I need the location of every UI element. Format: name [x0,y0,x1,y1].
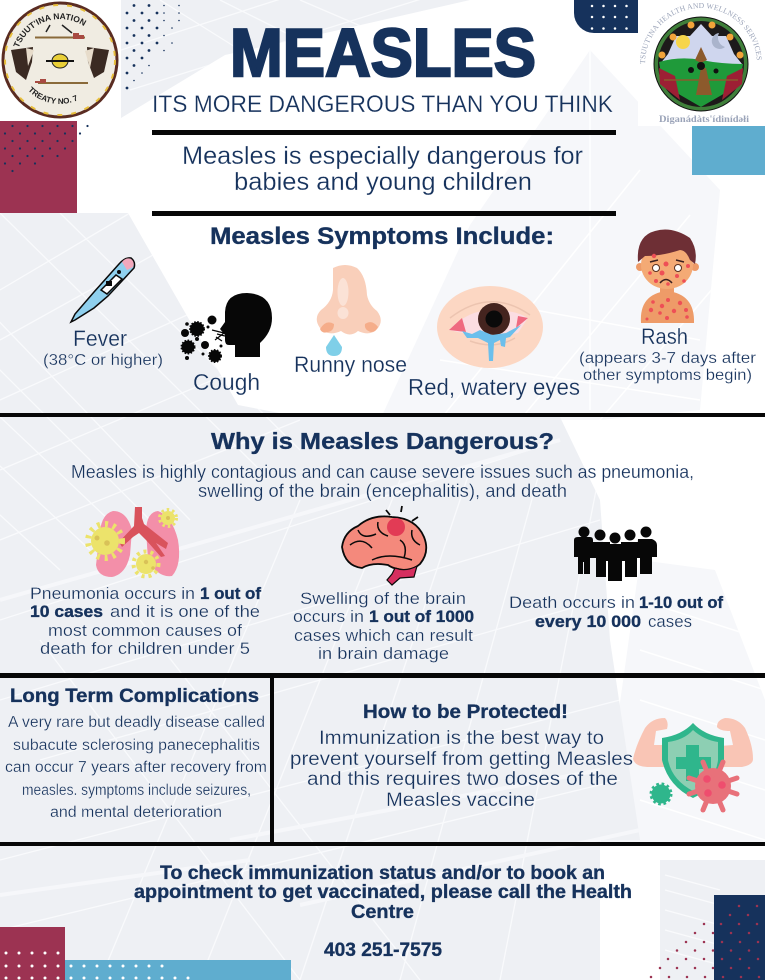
danger: pneumonia: Pneumonia occurs in [30,584,195,603]
panel: long term complications: and mental deterioration [50,804,222,821]
icon: boy with rash [636,230,699,323]
phone number: 403 251-7575 [324,940,442,961]
icon: thermometer [71,258,135,322]
icon: brain [342,506,426,585]
tagline: Measles is especially dangerous for [182,142,583,170]
icon: coughing head [181,293,272,362]
decoration: navy corner tab [574,0,638,33]
call to action: To check immunization status and/or to book an [160,863,605,884]
panel: how to be protected: Immunization is the best way to [319,727,604,749]
heading: why dangerous: Why is Measles Dangerous? [211,428,554,454]
heading: symptoms: Measles Symptoms Include: [210,223,554,250]
panel: long term complications: subacute sclerosing panecephalitis [13,737,260,754]
panel: how to be protected: How to be Protected! [363,702,568,723]
symptom: rash: (appears 3-7 days after [579,350,757,367]
panel: long term complications: Long Term Complications [10,686,259,707]
danger: brain swelling [293,506,474,663]
danger: pneumonia: and it is one of the [110,602,260,621]
danger: brain swelling: cases which can result [294,626,473,645]
danger: pneumonia: most common causes of [48,621,242,640]
call to action: Centre [351,902,414,923]
symptom: rash: Rash [641,324,688,349]
call to action [134,863,632,961]
decoration: blue square [692,126,765,175]
divider bar [152,130,616,135]
danger: death [509,526,723,631]
danger: death: Death occurs in [509,593,635,612]
panel: how to be protected: and this requires two doses of the [307,768,618,790]
panel divider [270,678,274,844]
icon: nose [317,265,381,356]
seal text: TSUUT'INA NATION [13,13,86,46]
decoration: maroon square [0,121,90,213]
decoration: bottom-right block [651,895,765,980]
section divider [0,413,765,417]
intro text: swelling of the brain (encephalitis), and death [198,481,567,501]
logo: Tsuut'ina Nation seal [2,2,118,118]
seal arc text: TSUUT'INA HEALTH AND WELLNESS SERVICES [640,3,762,64]
subtitle: ITS MORE DANGEROUS THAN YOU THINK [152,91,613,118]
icon: shield with muscles and virus [633,718,753,810]
intro text [71,462,694,501]
decoration: bottom-left blocks [0,927,291,980]
section divider [0,842,765,846]
panel: long term complications [5,686,267,821]
danger: brain swelling: Swelling of the brain [300,589,466,608]
icon: group of people [574,526,657,581]
panel: how to be protected: Measles vaccine [386,789,535,811]
symptom: cough: Cough [193,369,260,395]
seal pipes, feathers and sun [11,25,109,83]
icon: lungs with viruses [88,507,179,577]
seal lower text: TREATY NO. 7 [29,86,76,104]
danger: brain swelling: 1 out of 1000 [369,607,474,626]
symptom: fever [43,258,163,369]
panel: how to be protected: prevent yourself from getting Measles [290,748,633,770]
danger: pneumonia [30,507,261,658]
symptom: cough [181,293,272,395]
danger: brain swelling: occurs in [293,607,364,626]
symptom: runny nose: Runny nose [294,352,407,377]
symptom: red watery eyes [408,286,580,400]
symptom: fever: Fever [73,326,127,351]
tagline [182,142,583,196]
panel: long term complications: measles. symptoms include seizures, [22,782,251,799]
danger: death: cases [648,612,692,631]
symptom: runny nose [294,265,407,377]
danger: pneumonia: death for children under 5 [40,639,250,658]
panel: long term complications: A very rare but deadly disease called [8,714,265,731]
danger: pneumonia: 10 cases [30,602,103,621]
panel: long term complications: can occur 7 years after recovery from [5,759,267,776]
danger: brain swelling: in brain damage [318,644,449,663]
decoration: top-left dots [127,6,190,88]
symptom: rash [579,230,757,384]
section divider [0,673,765,678]
icon: eye [437,286,543,368]
danger: pneumonia: 1 out of [200,584,261,603]
divider bar [152,211,616,216]
symptom: red watery eyes: Red, watery eyes [408,374,580,400]
symptom: rash: other symptoms begin) [583,367,752,384]
intro text: Measles is highly contagious and can cause severe issues such as pneumonia, [71,462,694,482]
tagline: babies and young children [234,168,532,196]
danger: death: every 10 000 [535,612,641,631]
seal motto: Diganádàts'ídinídəłi [659,114,750,124]
call to action: appointment to get vaccinated, please call the Health [134,882,632,903]
danger: death: 1-10 out of [639,593,723,612]
panel: how to be protected [290,702,753,811]
symptom: fever: (38°C or higher) [43,352,163,369]
title: MEASLES [230,15,536,91]
logo: health and wellness services seal [638,3,762,126]
